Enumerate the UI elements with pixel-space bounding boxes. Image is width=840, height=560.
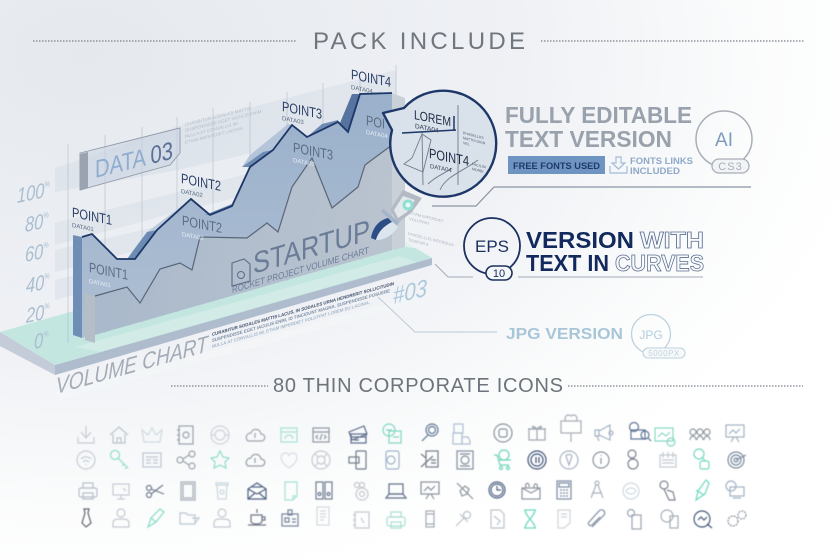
- icon: sale sign: [561, 415, 581, 442]
- magnifier bubble: FACILISI: [472, 162, 486, 169]
- icon: credit cards: [349, 426, 367, 443]
- icon: pushpin: [456, 512, 470, 526]
- icon: green printer: [387, 512, 405, 528]
- front series labels: POINT2: [182, 212, 222, 236]
- icon: heart: [281, 453, 297, 468]
- startup heading: ROCKET PROJECT VOLUME CHART: [232, 245, 369, 296]
- icon: feather pen: [148, 509, 164, 527]
- version with text in curves heading: CURVES: [615, 250, 704, 276]
- front series labels: POINT1: [89, 259, 128, 283]
- fonts links text: INCLUDED: [630, 166, 680, 177]
- icon: printer: [79, 483, 97, 499]
- faint paragraph: NULLA AT CONVALLIS MI: [185, 121, 238, 139]
- JPG badge: [632, 314, 685, 358]
- icon: share: [177, 451, 195, 469]
- side notes: VOLUTPAT: [409, 216, 430, 226]
- icon: touch phone: [386, 451, 399, 469]
- icon: page: [285, 482, 297, 500]
- icon: gift: [528, 426, 546, 440]
- icon: code window: [313, 428, 329, 442]
- front series area: [95, 145, 392, 335]
- icon: web speed: [281, 428, 297, 442]
- chart description: NULLA AT CONVALLIS MI. ETIAM IMPERDIET VOLUTPAT LOREM EU LACINIA.: [212, 300, 370, 349]
- icon: calendar: [660, 452, 676, 467]
- background percent bands: [55, 70, 396, 300]
- back series labels: POINT2: [181, 170, 221, 194]
- percent axis labels: 20: [26, 302, 44, 329]
- back series labels: DATA03: [282, 116, 304, 126]
- fully editable heading: [505, 102, 692, 152]
- AI badge: AI: [715, 130, 733, 151]
- icon: woman: [214, 509, 230, 527]
- percent axis labels: %: [43, 328, 49, 339]
- percent axis labels: %: [44, 300, 50, 311]
- back series labels: POINT4: [351, 66, 391, 90]
- back series labels: DATA04: [351, 85, 373, 95]
- icon: crown: [142, 428, 162, 442]
- icon: repair tools: [421, 451, 438, 467]
- icon: gears: [728, 511, 746, 526]
- icon: cloud upload: [246, 454, 265, 466]
- back series labels: DATA02: [181, 189, 203, 199]
- rocket illustration: [371, 190, 422, 240]
- magnifier bubble: DATA04: [430, 164, 452, 174]
- icon: desktop settings: [726, 481, 744, 498]
- icon: search panel: [630, 422, 651, 441]
- back series labels: [72, 66, 391, 233]
- icon: coffee cup: [216, 483, 228, 499]
- icon: scissors: [146, 485, 164, 498]
- faint paragraph: [185, 106, 262, 145]
- percent axis labels: 60: [25, 241, 43, 268]
- free fonts badge: FREE FONTS USED: [513, 161, 600, 172]
- side notes: PHASELLUS INTERDUM: [408, 231, 454, 248]
- back series line: [82, 93, 392, 259]
- front series line: [95, 145, 392, 303]
- version with text in curves heading: TEXT IN: [526, 250, 609, 276]
- icon: id badge: [282, 510, 298, 526]
- magnifier bubble: VEL: [463, 141, 470, 147]
- icon: map document: [491, 510, 504, 528]
- icon: coffee: [248, 509, 266, 525]
- version with text in curves heading: WITH: [640, 227, 704, 253]
- percent axis labels: %: [44, 178, 50, 190]
- front side bar: [85, 293, 95, 343]
- fully editable heading: FULLY EDITABLE: [505, 102, 692, 128]
- icon: calculator: [557, 481, 571, 499]
- percent axis labels: 40: [26, 272, 44, 299]
- icon: round stamp: [494, 424, 512, 442]
- icon: support: [628, 450, 638, 469]
- icon: note: [558, 510, 570, 528]
- icon: compass: [591, 481, 603, 498]
- icon: necktie: [82, 509, 91, 527]
- JPG badge: JPG: [639, 328, 663, 342]
- fonts links text: FONTS LINKS: [630, 156, 693, 167]
- AI badge: [696, 111, 752, 173]
- volume chart: [0, 65, 454, 400]
- icon: home: [110, 427, 128, 443]
- icon: presentation: [726, 425, 744, 442]
- icon: phone chat: [628, 510, 641, 529]
- icon: folder: [180, 513, 199, 524]
- icon: star: [211, 451, 229, 468]
- faint paragraph: SUSPENDISSE EGET IACULIS ENIM: [185, 109, 262, 133]
- percent axis labels: 0: [34, 329, 43, 355]
- icon: mail: [248, 483, 266, 499]
- icon: magnifier: [422, 424, 438, 441]
- magnifier bubble: PHASELLUS: [463, 131, 484, 140]
- percent axis labels: %: [43, 209, 49, 220]
- icon: shopping cart: [494, 450, 511, 470]
- magnifier bubble: DATA04: [415, 123, 439, 135]
- volume chart label: [55, 296, 420, 400]
- icon: camera: [354, 482, 368, 500]
- icon: megaphone: [595, 425, 613, 441]
- icon: mobile payment: [349, 451, 366, 469]
- JPG badge: 5000PX: [648, 349, 680, 358]
- icon: sync: [211, 426, 229, 444]
- AI badge: CS3: [718, 161, 743, 173]
- magnifier bubble: MORBI: [472, 167, 483, 174]
- right side wall: [392, 93, 405, 250]
- icon: info: [593, 452, 609, 468]
- magnifier bubble: POINT4: [429, 145, 469, 169]
- startup heading: [232, 214, 370, 296]
- grid lines: [68, 65, 396, 343]
- front series labels: POINT3: [293, 139, 333, 163]
- percent axis labels: [17, 178, 50, 355]
- icon: smartphone: [426, 511, 434, 527]
- percent axis labels: 100: [17, 180, 44, 209]
- icon: spark tool: [457, 483, 473, 499]
- front series labels: [89, 112, 388, 289]
- icon: cloud: [246, 429, 265, 441]
- icon: hourglass: [524, 510, 536, 528]
- chart description: SUSPENDISSE EGET IACULIS ENIM, ID TINCIDUNT MAGNA. SUSPENDISSE POSUERE: [212, 288, 390, 343]
- icon: thumbs circle: [528, 451, 546, 469]
- icon: tablet: [181, 482, 195, 500]
- jpg version text: JPG VERSION: [506, 326, 623, 343]
- icon: chat document: [383, 424, 401, 443]
- icon: wifi: [77, 451, 95, 469]
- icon: safe: [457, 451, 473, 469]
- back series area: [82, 93, 392, 338]
- back series bevels: [73, 94, 360, 338]
- front series labels: DATA03: [293, 158, 315, 168]
- icon: download: [78, 426, 94, 443]
- icon: man: [113, 509, 129, 527]
- icon: board chart: [421, 482, 439, 499]
- icon: key: [110, 450, 128, 469]
- icon: address book: [177, 426, 193, 444]
- chart description: CURABITUR SODALES MATTIS LACUS, IN SODALES URNA HENDRERIT SOLLICITUDIN: [212, 281, 395, 337]
- icon: mobile stats: [661, 510, 678, 528]
- leader line: editable: [432, 187, 751, 206]
- data 03 tag: DATA 03: [95, 137, 173, 184]
- EPS badge: [464, 218, 520, 280]
- icon: report: [317, 507, 329, 525]
- leader line: jpg: [378, 297, 497, 332]
- free fonts badge: [508, 156, 605, 174]
- icon: clock: [489, 482, 505, 498]
- faint paragraph: ETIAM IMPERDIET LACINIA: [185, 125, 244, 145]
- icon: lifebuoy: [312, 451, 330, 469]
- icon: rocket: [696, 480, 709, 500]
- icon: hand coin: [660, 481, 675, 500]
- icon: team: [690, 429, 710, 440]
- icon: pin circle: [560, 451, 578, 469]
- volume chart label: VOLUME CHART: [56, 330, 209, 399]
- icon: delivery truck: [453, 424, 470, 444]
- percent axis labels: %: [44, 270, 50, 281]
- side notes: ETIAM IMPERDIET: [409, 210, 445, 224]
- faint paragraph: CURABITUR SODALES MATTIS: [185, 106, 251, 127]
- EPS badge: 10: [493, 268, 505, 280]
- side notes: TEMPOR A: [408, 237, 429, 247]
- EPS badge: EPS: [475, 237, 509, 256]
- startup heading: STARTUP: [253, 214, 370, 281]
- magnifier bubble: MATTIS DIGN: [463, 136, 486, 146]
- side notes: [408, 210, 454, 248]
- icon: news: [143, 453, 161, 467]
- leader line: curves: [435, 264, 703, 277]
- icon: growth chart: [655, 428, 675, 446]
- icon: loop search: [694, 511, 712, 528]
- version with text in curves heading: [526, 227, 704, 276]
- front series labels: DATA04: [366, 130, 388, 140]
- percent axis labels: %: [43, 239, 49, 250]
- front series labels: POI: [366, 112, 385, 132]
- icon: binders: [316, 482, 332, 499]
- #03 label: #03: [393, 274, 427, 309]
- percent axis labels: 80: [25, 211, 43, 238]
- icons heading: 80 THIN CORPORATE ICONS: [273, 375, 563, 397]
- fully editable heading: TEXT VERSION: [505, 126, 672, 152]
- back series labels: POINT1: [72, 204, 112, 228]
- icon: target: [728, 452, 746, 468]
- side notes panel: [405, 98, 432, 250]
- icon: paper clip: [588, 510, 605, 527]
- icon: briefcase: [522, 483, 540, 499]
- icon: swirl: [623, 483, 639, 499]
- magnifier bubble: LOREM: [414, 107, 451, 129]
- back series labels: DATA01: [72, 223, 94, 233]
- icon: chat bubbles: [694, 449, 709, 469]
- fonts links text: [630, 156, 693, 177]
- front series labels: DATA02: [182, 232, 204, 242]
- title: PACK INCLUDE: [313, 28, 525, 55]
- version with text in curves heading: VERSION: [526, 227, 634, 253]
- magnifier bubble: [383, 91, 496, 197]
- icon: monitor: [113, 484, 129, 499]
- data 03 tag: [80, 128, 180, 190]
- platform: [0, 236, 432, 375]
- icon: fonts download: [610, 157, 627, 173]
- back series labels: POINT3: [282, 98, 322, 122]
- icon: phonebook: [353, 512, 369, 528]
- icon grid: [77, 415, 746, 529]
- front series labels: DATA01: [89, 279, 111, 289]
- icon: laptop: [386, 484, 406, 498]
